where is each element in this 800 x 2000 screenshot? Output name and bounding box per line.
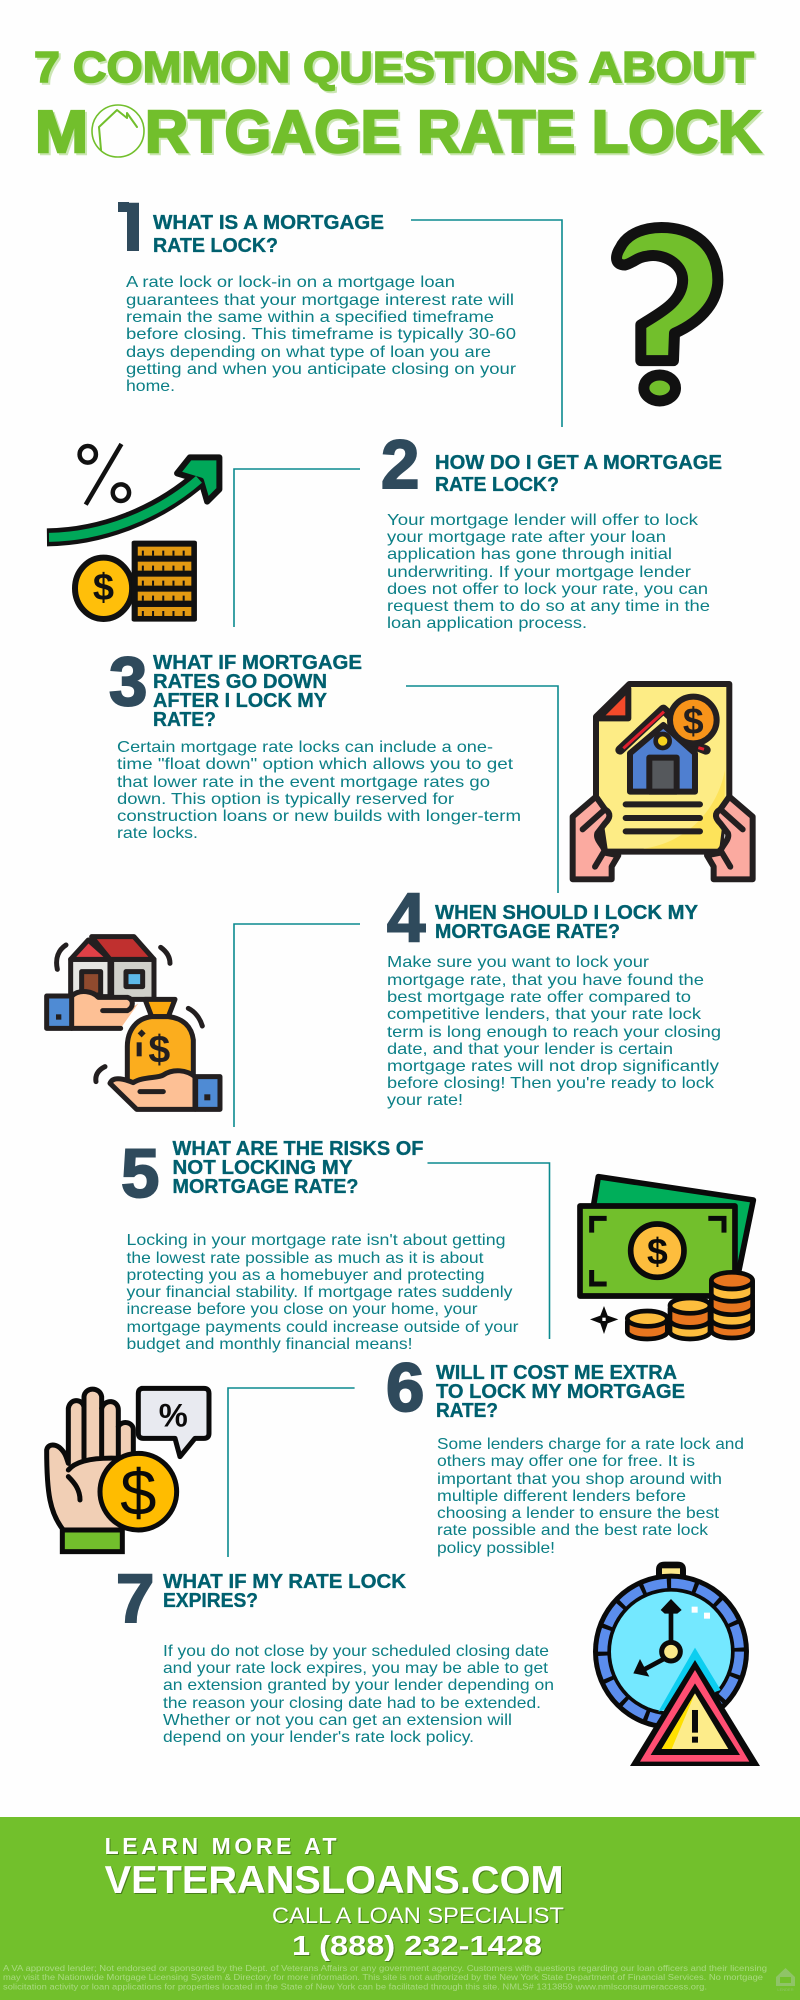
icon: hand with coin and percent bubble: $ (120, 1456, 156, 1529)
number 1 (118, 202, 139, 251)
heading 4: WHEN SHOULD I LOCK MY (435, 902, 699, 924)
body text 6: multiple different lenders before (437, 1488, 686, 1505)
body text 5: mortgage payments could increase outside of your (126, 1319, 519, 1336)
number 6: 6 (386, 1349, 424, 1426)
heading 5: WHAT ARE THE RISKS OF (172, 1138, 424, 1160)
heading 7: WHAT IF MY RATE LOCK (163, 1571, 407, 1593)
body text 2: your mortgage rate after your loan (387, 529, 666, 546)
body text 4 (387, 954, 721, 1109)
heading 3: AFTER I LOCK MY (153, 690, 328, 712)
heading 3 (153, 652, 362, 731)
body text 5: budget and monthly financial means! (126, 1336, 412, 1353)
heading 1: WHAT IS A MORTGAGE (153, 212, 384, 234)
title: RTGAGE RATE LOCK (145, 99, 761, 165)
number 4: 4 (387, 879, 425, 956)
body text 1: home. (126, 378, 175, 395)
body text 6: policy possible! (437, 1540, 555, 1557)
body text 5: Locking in your mortgage rate isn't about getting (126, 1232, 505, 1249)
number 1: 1 (109, 189, 153, 266)
body text 7: the reason your closing date had to be extended. (163, 1695, 541, 1712)
legal disclaimer: solicitation activity or loan applications for properties located in the State of New York can be facilitated through this site. NMLS# 1313859 www.nmlsconsumeraccess.org. (3, 1982, 707, 1992)
body text 5: the lowest rate possible as much as it is about (126, 1250, 484, 1267)
body text 1: guarantees that your mortgage interest rate will (126, 292, 514, 309)
heading 5: MORTGAGE RATE? (172, 1176, 358, 1198)
body text 4: term is long enough to reach your closing (387, 1024, 721, 1041)
icon: house and money bag exchange: $ (148, 1028, 170, 1072)
body text 7: If you do not close by your scheduled closing date (163, 1643, 549, 1660)
heading 4: MORTGAGE RATE? (435, 921, 620, 943)
footer call to action: 1 (888) 232-1428 (292, 1930, 542, 1961)
body text 3: that lower rate in the event mortgage rates go (117, 774, 490, 791)
body text 2: underwriting. If your mortgage lender (387, 564, 692, 581)
panel: question 7 (116, 1560, 760, 1766)
footer call to action: VETERANSLOANS.COM (105, 1859, 564, 1902)
panel: question 2 (47, 426, 722, 632)
body text 1: remain the same within a specified timeframe (126, 309, 494, 326)
heading 4 (435, 902, 699, 943)
heading 5 (172, 1138, 424, 1198)
body text 6: rate possible and the best rate lock (437, 1522, 709, 1539)
title: 7 COMMON QUESTIONS ABOUT (34, 43, 754, 92)
icon: rising rate arrow and coins: $ (93, 567, 114, 609)
body text 5: increase before you close on your home, your (126, 1301, 478, 1318)
body text 4: date, and that your lender is certain (387, 1041, 673, 1058)
body text 6: Some lenders charge for a rate lock and (437, 1436, 744, 1453)
connector line 4 (234, 924, 360, 1127)
icon: hand with coin and percent bubble (47, 1388, 209, 1552)
body text 3: rate locks. (117, 825, 198, 842)
icon: house logo in the letter O (92, 105, 144, 157)
body text 4: mortgage rates will not drop significantly (387, 1058, 719, 1075)
legal disclaimer (3, 1963, 767, 1992)
heading 6: RATE? (436, 1400, 498, 1422)
heading 6 (436, 1362, 685, 1422)
body text 1: before closing. This timeframe is typically 30-60 (126, 326, 516, 343)
number 3: 3 (109, 643, 147, 720)
icon: hands holding house document (573, 684, 753, 879)
footer call to action: CALL A LOAN SPECIALIST (272, 1903, 564, 1928)
body text 7: Whether or not you can get an extension will (163, 1712, 512, 1729)
icon: equal housing lender (776, 1968, 795, 1992)
body text 4: best mortgage rate offer compared to (387, 989, 691, 1006)
connector line 6 (228, 1388, 355, 1557)
panel: question 5 (121, 1135, 753, 1353)
icon: question mark (617, 227, 718, 401)
body text 1: getting and when you anticipate closing on your (126, 361, 517, 378)
body text 3: down. This option is typically reserved for (117, 791, 455, 808)
icon: stopwatch with warning triangle (593, 1562, 760, 1766)
connector line 2 (234, 469, 360, 627)
heading 3: RATES GO DOWN (153, 671, 327, 693)
panel: question 6 (47, 1349, 744, 1557)
body text 5 (126, 1232, 519, 1353)
heading 1: RATE LOCK? (153, 235, 278, 257)
footer call to action (105, 1833, 564, 1961)
body text 2 (387, 512, 710, 632)
body text 2: application has gone through initial (387, 546, 672, 563)
footer call to action: LEARN MORE AT (105, 1833, 337, 1859)
legal disclaimer: may visit the Nationwide Mortgage Licensing System & Directory for more information. This site is not authorized by the New York State Department of Financial Services. No mortgage (3, 1972, 763, 1982)
footer band (0, 1817, 800, 2000)
body text 6 (437, 1436, 744, 1557)
panel: question 4 (47, 879, 721, 1127)
body text 4: your rate! (387, 1092, 463, 1109)
heading 2: RATE LOCK? (435, 474, 559, 496)
heading 3: WHAT IF MORTGAGE (153, 652, 362, 674)
body text 6: important that you shop around with (437, 1471, 722, 1488)
body text 4: before closing! Then you're ready to lock (387, 1075, 715, 1092)
panel: question 1 (109, 189, 718, 427)
body text 1 (126, 274, 517, 395)
body text 1: days depending on what type of loan you are (126, 344, 491, 361)
body text 1: A rate lock or lock-in on a mortgage loan (126, 274, 455, 291)
body text 7 (163, 1643, 554, 1746)
heading 1 (153, 212, 384, 257)
body text 2: Your mortgage lender will offer to lock (387, 512, 699, 529)
heading 7 (163, 1571, 407, 1612)
body text 7: depend on your lender's rate lock policy. (163, 1729, 474, 1746)
connector line 5 (428, 1163, 550, 1339)
heading 2 (435, 452, 722, 496)
connector line 1 (411, 220, 562, 427)
icon: hand with coin and percent bubble: % (159, 1397, 188, 1434)
icon: equal housing lender: LENDER (777, 1987, 794, 1992)
icon: house and money bag exchange (47, 937, 220, 1109)
heading 6: WILL IT COST ME EXTRA (436, 1362, 677, 1384)
icon: cash and coin stacks: $ (647, 1230, 668, 1272)
number 7: 7 (116, 1560, 154, 1637)
number 2: 2 (381, 426, 419, 503)
body text 4: competitive lenders, that your rate lock (387, 1006, 702, 1023)
icon: rising rate arrow and coins (47, 444, 219, 622)
title (34, 43, 761, 165)
body text 7: an extension granted by your lender depending on (163, 1677, 554, 1694)
body text 3 (117, 739, 521, 842)
connector line 3 (406, 686, 558, 893)
heading 7: EXPIRES? (163, 1590, 258, 1612)
title: M (35, 99, 88, 165)
body text 2: request them to do so at any time in the (387, 598, 710, 615)
body text 6: others may offer one for free. It is (437, 1453, 695, 1470)
heading 3: RATE? (153, 709, 216, 731)
panel: question 3 (109, 643, 753, 893)
body text 4: mortgage rate, that you have found the (387, 972, 704, 989)
legal disclaimer: A VA approved lender; Not endorsed or sponsored by the Dept. of Veterans Affairs or any government agency. Customers with questions regarding our loan officers and their licensing (3, 1963, 767, 1973)
body text 5: your financial stability. If mortgage rates suddenly (126, 1284, 512, 1301)
heading 6: TO LOCK MY MORTGAGE (436, 1381, 685, 1403)
body text 6: choosing a lender to ensure the best (437, 1505, 720, 1522)
body text 3: construction loans or new builds with longer-term (117, 808, 521, 825)
body text 3: Certain mortgage rate locks can include a one- (117, 739, 493, 756)
heading 2: HOW DO I GET A MORTGAGE (435, 452, 722, 474)
number 5: 5 (121, 1135, 159, 1212)
icon: hands holding house document: $ (683, 699, 704, 741)
heading 5: NOT LOCKING MY (172, 1157, 353, 1179)
body text 3: time "float down" option which allows you to get (117, 756, 514, 773)
body text 7: and your rate lock expires, you may be able to get (163, 1660, 549, 1677)
body text 2: loan application process. (387, 615, 587, 632)
body text 2: does not offer to lock your rate, you can (387, 581, 708, 598)
body text 4: Make sure you want to lock your (387, 954, 650, 971)
body text 5: protecting you as a homebuyer and protecting (126, 1267, 484, 1284)
icon: cash and coin stacks (580, 1177, 753, 1339)
